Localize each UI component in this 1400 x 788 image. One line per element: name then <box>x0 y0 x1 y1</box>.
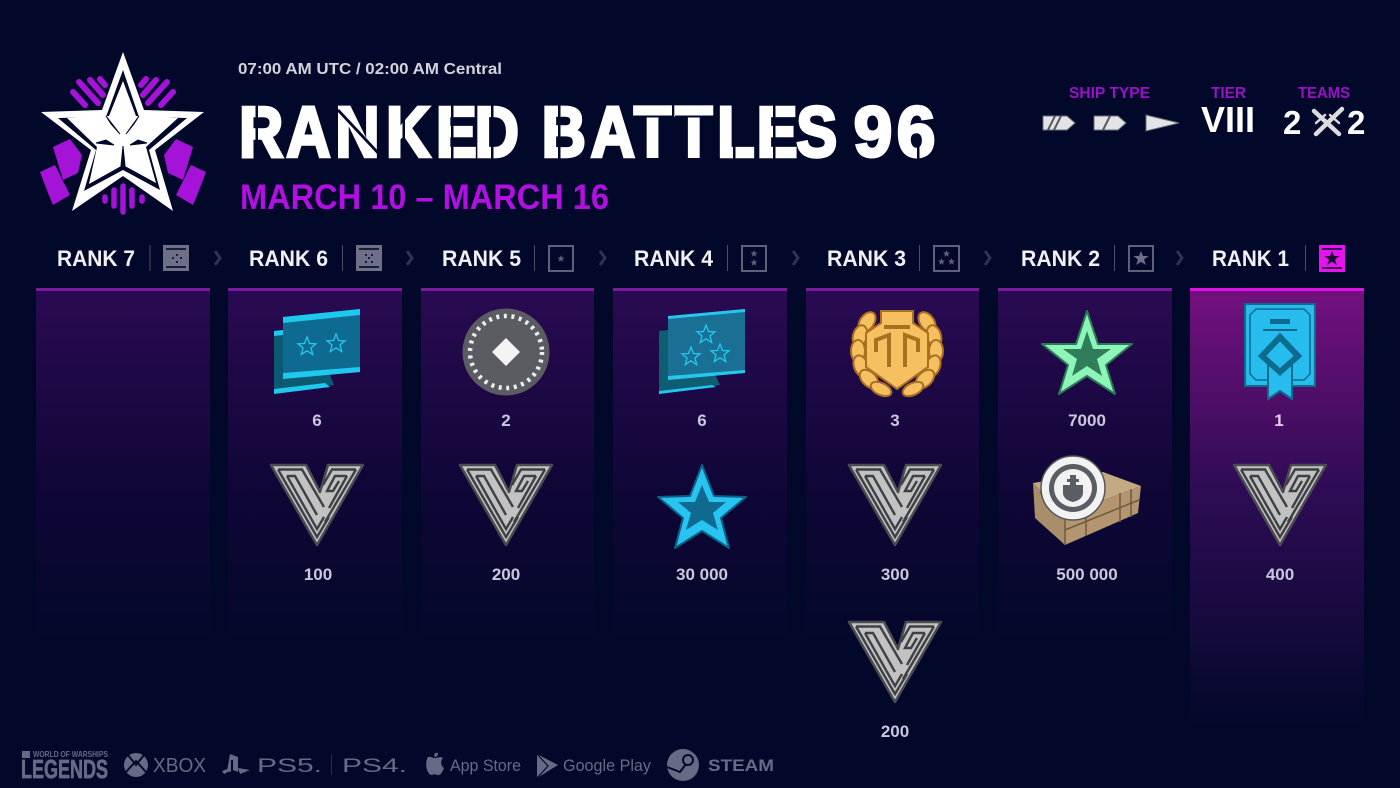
reward value 200 extra: 200 <box>881 722 909 741</box>
legends logo: WORLD OF WARSHIPS <box>33 750 109 759</box>
tier label: TIER <box>1211 85 1246 102</box>
rank 1 header: RANK 1 <box>1212 246 1289 271</box>
icon: league points extra <box>849 622 941 702</box>
panel: rank 3 <box>806 288 979 651</box>
chevron <box>985 251 990 265</box>
logo purple stripes and ribbons <box>40 79 206 212</box>
rank 7 header: RANK 7 <box>57 246 135 271</box>
footer: platform logos <box>21 749 774 784</box>
chevron <box>600 251 605 265</box>
rank 2 header <box>1021 245 1153 271</box>
reward value 500 000: 500 000 <box>1056 565 1118 584</box>
icon: league points <box>1234 465 1326 545</box>
rank 4 header <box>634 245 766 271</box>
icon: league points <box>271 465 363 545</box>
legends logo: LEGENDS <box>21 754 108 784</box>
steam logo: STEAM <box>708 756 774 775</box>
rank 6 header: RANK 6 <box>249 246 328 271</box>
tier value: VIII <box>1201 99 1255 140</box>
teams label: TEAMS <box>1298 85 1350 102</box>
icon: signal disc <box>462 308 550 396</box>
reward value 200: 200 <box>492 565 520 584</box>
reward value 30 000: 30 000 <box>676 565 728 584</box>
rank 5 header: RANK 5 <box>442 246 521 271</box>
app store logo: App Store <box>450 756 521 775</box>
rank 3 header: RANK 3 <box>827 246 906 271</box>
title stencil cuts <box>256 103 920 160</box>
reward count 6: 6 <box>697 411 707 430</box>
panel: rank 1 <box>1190 288 1364 731</box>
icon: certificate <box>1245 304 1315 399</box>
reward count 1: 1 <box>1274 411 1284 430</box>
rank 4 header: RANK 4 <box>634 246 714 271</box>
rank 6 header <box>249 245 382 271</box>
rank 5 header <box>442 245 573 271</box>
icon: green star <box>1042 311 1132 394</box>
teams left value: 2 <box>1283 104 1301 141</box>
reward count 2: 2 <box>501 411 511 430</box>
panel: rank 2 <box>998 288 1172 651</box>
ship type label: SHIP TYPE <box>1069 85 1150 102</box>
title: 96 <box>854 92 935 172</box>
chevron <box>215 251 220 265</box>
app store logo <box>426 753 521 775</box>
xbox logo <box>124 753 206 777</box>
icon: league points <box>849 465 941 545</box>
legends logo <box>21 750 109 784</box>
teams block <box>1283 85 1365 141</box>
icon: battleship <box>1146 115 1179 131</box>
icon: cruiser <box>1094 116 1126 130</box>
steam logo <box>667 749 774 781</box>
google play logo: Google Play <box>563 756 651 775</box>
icon: gold laurel crest <box>850 309 944 399</box>
reward value 100: 100 <box>304 565 332 584</box>
panel: rank 4 <box>613 288 787 651</box>
icon: three star flags <box>659 309 745 394</box>
icon: destroyer <box>1043 116 1075 130</box>
panel: rank 7 <box>36 288 210 651</box>
rank 2 header: RANK 2 <box>1021 246 1100 271</box>
logo: ranked star emblem <box>40 52 206 212</box>
rank header row <box>57 245 1345 272</box>
google play logo <box>537 754 651 778</box>
icon: crossed swords <box>1314 109 1342 134</box>
reward count 3: 3 <box>890 411 900 430</box>
rank 7 header <box>57 245 189 271</box>
icon: two star flags <box>274 309 360 394</box>
playstation 5 logo: PS5. <box>257 756 322 777</box>
chevron <box>407 251 412 265</box>
rank 1 header <box>1212 245 1345 272</box>
panel: rank 6 <box>228 288 402 651</box>
reward count 7000: 7000 <box>1068 411 1106 430</box>
icon: credits crate <box>1033 456 1141 545</box>
ship type block <box>1043 85 1179 131</box>
chevron <box>793 251 798 265</box>
reward value 300: 300 <box>881 565 909 584</box>
date line: MARCH 10 – MARCH 16 <box>240 178 609 217</box>
playstation 5 logo: PS4. <box>342 756 407 777</box>
icon: league points <box>460 465 552 545</box>
icon: blue star <box>658 465 746 548</box>
reward value 400: 400 <box>1266 565 1294 584</box>
rank 3 header <box>827 245 959 271</box>
title: RANKEDBATTLES <box>239 93 837 173</box>
tier block <box>1201 85 1255 140</box>
xbox logo: XBOX <box>153 755 206 777</box>
reward count 6: 6 <box>312 411 322 430</box>
teams right value: 2 <box>1347 104 1365 141</box>
playstation 5 logo <box>222 754 407 777</box>
logo white star <box>41 52 204 211</box>
chevron <box>1177 251 1182 265</box>
panel: rank 5 <box>421 288 594 651</box>
time line: 07:00 AM UTC / 02:00 AM Central <box>238 61 502 78</box>
